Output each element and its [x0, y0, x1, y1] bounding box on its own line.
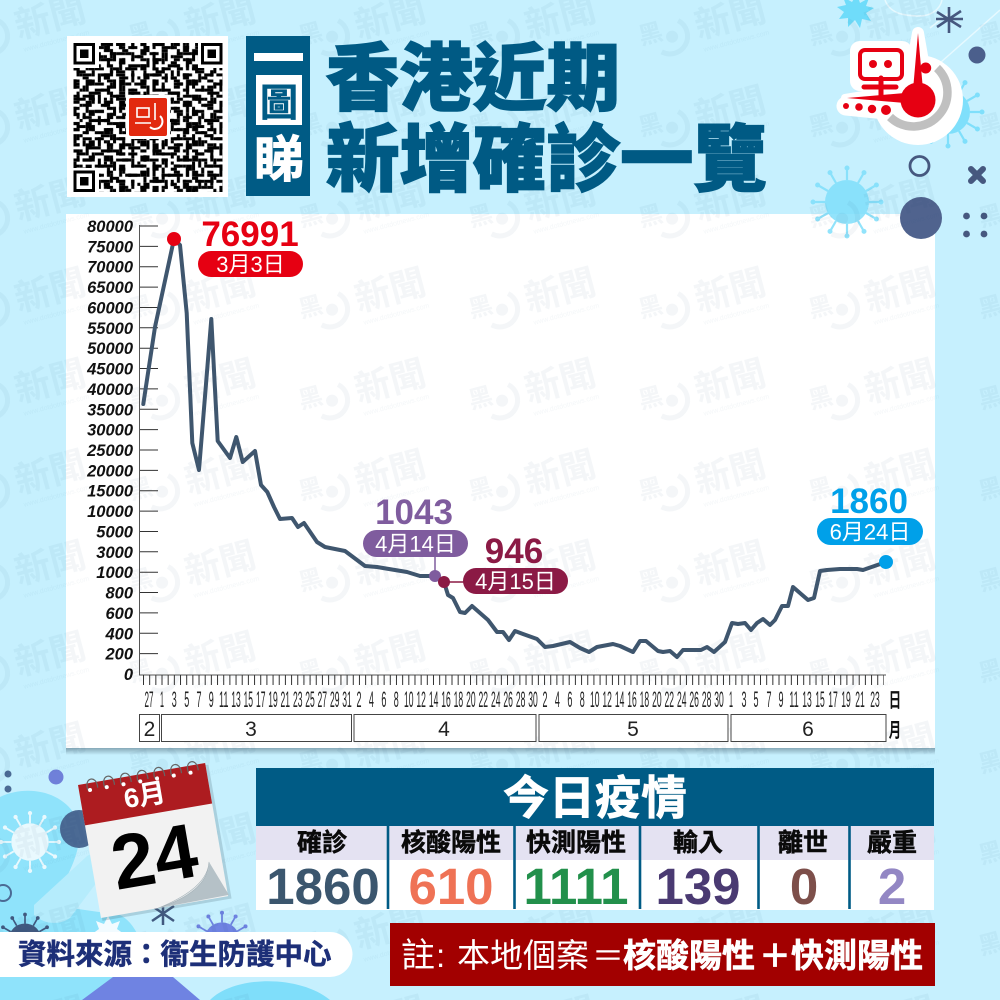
source pill: 資料來源：衞生防護中心 [18, 939, 332, 971]
table column headers: 確診 [297, 829, 347, 857]
x axis day labels: 10 [404, 687, 413, 712]
x axis day labels: 14 [615, 687, 624, 712]
title badge: 一圖睇: 睇 [254, 132, 304, 188]
x axis day labels: 13 [802, 687, 812, 712]
table column headers: 輸入 [673, 829, 723, 857]
y axis labels: 25000 [86, 442, 134, 460]
y axis labels: 30000 [87, 422, 134, 440]
callout: 1860 on 6月24日: 1860 [830, 482, 908, 521]
x axis day labels: 3 [172, 687, 177, 712]
x axis day labels: 2 [542, 687, 548, 712]
x axis day labels: 4 [555, 687, 560, 712]
x axis day labels: 8 [580, 687, 585, 712]
x axis day labels: 24 [491, 687, 500, 712]
table values: 610 [408, 858, 494, 915]
callout: 946 on 4月15日: 4月15日 [475, 569, 556, 594]
x axis day labels: 27 [144, 687, 154, 712]
y axis labels: 45000 [86, 360, 134, 378]
x axis day labels: 17 [256, 687, 265, 712]
x axis day labels: 23 [293, 687, 302, 712]
x axis day labels: 25 [305, 687, 315, 712]
title: 香港近期 [326, 37, 620, 120]
y axis labels: 3000 [96, 544, 134, 562]
x axis day labels: 18 [640, 687, 649, 712]
x axis day labels: 28 [516, 687, 525, 712]
logo: 點 [843, 33, 963, 145]
table column headers: 核酸陽性 [401, 829, 501, 857]
note bar [390, 923, 935, 986]
calendar: 6月24: 6月 [122, 777, 168, 814]
callout: peak 76991 on 3月3日 [167, 215, 303, 277]
calendar: 6月24: 24 [105, 807, 204, 907]
y axis labels: 15000 [87, 483, 134, 501]
callout: 1043 on 4月14日 [363, 493, 468, 582]
x axis day labels: 28 [702, 687, 711, 712]
x axis day labels: 5 [184, 687, 189, 712]
x axis day labels: 12 [416, 687, 426, 712]
x axis day labels: 1 [729, 687, 733, 712]
x axis day labels: 29 [330, 687, 339, 712]
QR code [67, 36, 228, 197]
callout: 1860 on 6月24日: 6月24日 [830, 520, 910, 544]
table values: 2 [878, 858, 906, 915]
table column headers: 離世 [778, 829, 828, 857]
decoration: bottom-left blobs [0, 770, 330, 1000]
title badge: 一圖睇 [246, 36, 310, 196]
x axis day labels: 2 [356, 687, 362, 712]
x axis day labels: 10 [590, 687, 599, 712]
x axis day labels: 22 [665, 687, 674, 712]
y axis labels: 5000 [96, 524, 134, 542]
note bar: 註 [401, 937, 435, 975]
x axis day labels: 31 [342, 687, 352, 712]
x axis day labels: 19 [841, 687, 851, 712]
callout: 946 on 4月15日: 946 [485, 532, 543, 571]
line chart: daily cases [143, 239, 886, 657]
x axis day labels: 21 [855, 687, 865, 712]
x axis day labels: 26 [503, 687, 513, 712]
y axis labels: 70000 [87, 259, 134, 277]
x axis day labels: 24 [677, 687, 686, 712]
y axis labels: 50000 [87, 340, 134, 358]
decoration: top-right virus and shapes [837, 0, 1000, 237]
note bar: : [436, 937, 445, 974]
table header [256, 768, 934, 826]
y axis labels: 75000 [87, 238, 134, 256]
y axis labels: 400 [104, 625, 134, 643]
chart axes and ticks [140, 225, 886, 680]
panel: chart background [66, 214, 935, 748]
x axis day labels: 12 [602, 687, 612, 712]
note bar: 本地個案 [457, 937, 589, 974]
month boxes [140, 714, 901, 742]
callout: 1043 on 4月14日: 4月14日 [375, 532, 456, 556]
title [326, 37, 767, 201]
panel shadow [66, 748, 935, 755]
x axis day labels: 4 [369, 687, 374, 712]
table values: 1111 [523, 858, 629, 915]
source pill [0, 932, 352, 977]
x axis day labels: 21 [281, 687, 290, 712]
note bar: ＋ [759, 938, 791, 974]
y axis labels: 800 [105, 584, 134, 602]
x axis day labels: 16 [441, 687, 451, 712]
title badge: 一圖睇: 圖 [260, 83, 298, 125]
callout: 1043 on 4月14日: 1043 [375, 493, 453, 532]
x axis day labels: 8 [394, 687, 399, 712]
y axis labels: 55000 [87, 320, 134, 338]
title: 新增確診一覽 [326, 118, 767, 201]
x axis day labels: 日 [889, 689, 901, 712]
x axis day labels: 3 [742, 687, 746, 712]
x axis day labels: 20 [466, 687, 476, 712]
table column headers: 快測陽性 [526, 829, 626, 857]
decoration: virus and circle over chart corner [813, 168, 942, 239]
x axis day labels: 6 [381, 687, 386, 712]
month boxes: 4 [438, 718, 450, 741]
x axis day labels: 22 [479, 687, 488, 712]
x axis day labels: 6 [567, 687, 572, 712]
x axis day labels: 30 [528, 687, 538, 712]
month boxes: 6 [802, 718, 814, 741]
table values [256, 858, 934, 915]
x axis day labels: 19 [268, 687, 278, 712]
x axis day labels: 7 [196, 687, 202, 712]
table values: 0 [790, 858, 818, 915]
x axis day labels: 16 [627, 687, 637, 712]
note bar: 快測陽性 [791, 937, 923, 974]
x axis day labels: 11 [219, 687, 228, 712]
y axis labels: 40000 [86, 381, 134, 399]
x axis day labels: 7 [766, 687, 772, 712]
x axis day labels: 18 [454, 687, 463, 712]
table column headers: 嚴重 [867, 829, 917, 857]
x axis day labels: 26 [689, 687, 699, 712]
x axis day labels: 9 [778, 687, 784, 712]
y axis labels: 0 [124, 666, 134, 684]
callout: 946 on 4月15日 [438, 532, 568, 594]
y axis labels [86, 218, 134, 684]
x axis day labels: 1 [160, 687, 164, 712]
table values: 139 [655, 858, 741, 915]
x axis day labels: 17 [828, 687, 838, 712]
x axis day labels [144, 687, 901, 712]
callout: peak 76991 on 3月3日: 76991 [201, 215, 299, 254]
x axis day labels: 13 [231, 687, 241, 712]
y axis labels: 35000 [87, 401, 134, 419]
calendar: 6月24 [77, 759, 232, 921]
month boxes: 5 [627, 718, 639, 741]
y axis labels: 60000 [87, 300, 134, 318]
table values: 1860 [266, 858, 380, 915]
x axis day labels: 5 [754, 687, 758, 712]
x axis day labels: 23 [870, 687, 880, 712]
table header: 今日疫情 [503, 772, 687, 824]
x axis day labels: 15 [815, 687, 825, 712]
note bar: ＝ [592, 938, 624, 974]
callout: 1860 on 6月24日 [817, 482, 923, 569]
y axis labels: 1000 [96, 564, 134, 582]
y axis labels: 20000 [86, 462, 134, 480]
note bar: 核酸陽性 [623, 937, 755, 974]
x axis day labels: 14 [429, 687, 438, 712]
x axis day labels: 30 [714, 687, 724, 712]
month boxes: 3 [245, 718, 257, 741]
y axis labels: 200 [104, 646, 134, 664]
y axis labels: 10000 [87, 503, 134, 521]
month boxes: 月 [889, 719, 901, 742]
x axis day labels: 27 [318, 687, 327, 712]
month boxes: 2 [144, 718, 155, 741]
table column headers [256, 826, 934, 860]
callout: peak 76991 on 3月3日: 3月3日 [216, 252, 285, 277]
x axis day labels: 11 [789, 687, 799, 712]
x axis day labels: 20 [652, 687, 662, 712]
x axis day labels: 15 [244, 687, 253, 712]
y axis labels: 65000 [87, 279, 134, 297]
y axis labels: 600 [105, 605, 134, 623]
x axis day labels: 9 [209, 687, 214, 712]
table: 今日疫情 [256, 768, 934, 915]
y axis labels: 80000 [87, 218, 134, 236]
